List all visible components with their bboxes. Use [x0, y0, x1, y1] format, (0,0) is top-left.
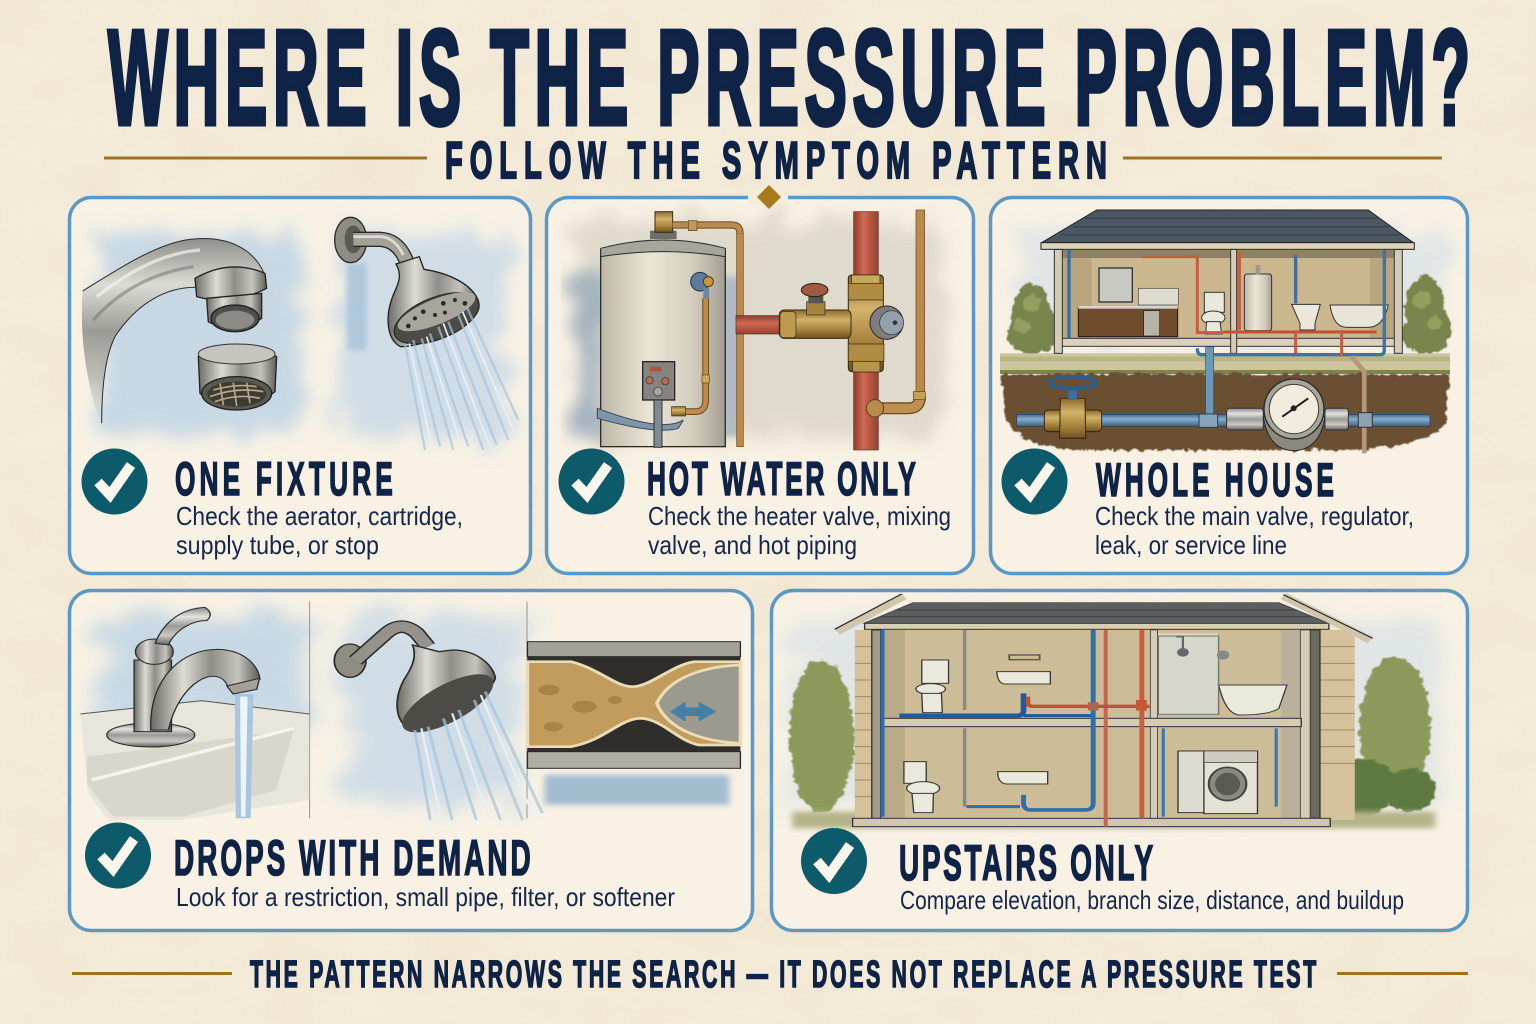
body text: [176, 501, 463, 560]
shower arm: [335, 217, 367, 263]
interior: [1062, 250, 1394, 339]
body text: [648, 501, 951, 560]
panel: upstairs only: [772, 590, 1468, 930]
upstairs fixtures: [904, 660, 1287, 813]
floors: [881, 718, 1301, 727]
faucet: [107, 723, 195, 747]
icon: check: [558, 448, 624, 514]
body text: supply tube, or stop: [176, 530, 379, 560]
heading: whole house: WHOLE HOUSE: [1096, 455, 1334, 507]
walls: [855, 630, 1355, 820]
shower head: [388, 257, 479, 347]
gauge: [1227, 408, 1263, 430]
washer: [1178, 751, 1205, 813]
body text: Compare elevation, branch size, distance, and buildup: [900, 885, 1404, 915]
decorative gap and diamond: [748, 185, 788, 209]
main pipe: [1017, 414, 1430, 426]
illustration: faucet, shower and restricted pipe: [80, 602, 740, 820]
illustration: two-storey house cutaway: [789, 594, 1440, 828]
flow arrow: [670, 702, 716, 722]
heading: drops with demand: DROPS WITH DEMAND: [174, 829, 531, 886]
control box: [643, 362, 675, 400]
kitchen: [1099, 268, 1132, 302]
illustration: faucet aerator and shower head: [82, 217, 518, 450]
icon: check: [85, 822, 151, 888]
gauge on tank: [691, 272, 709, 291]
right pipe: [854, 212, 878, 450]
heading: hot water only: HOT WATER ONLY: [647, 454, 916, 506]
faucet stream: [235, 694, 253, 818]
heading: one fixture: ONE FIXTURE: [175, 454, 393, 506]
body text: valve, and hot piping: [648, 530, 857, 560]
subtitle with rules: FOLLOW THE SYMPTOM PATTERN: [445, 131, 1107, 189]
panel: hot water only: [546, 198, 974, 574]
roof: [1042, 210, 1413, 243]
body text: Check the aerator, cartridge,: [176, 501, 463, 531]
collar: [195, 267, 267, 300]
sink: [80, 701, 309, 820]
illustration: house cutaway with main line: [1000, 210, 1451, 453]
valve: [1044, 410, 1102, 432]
roof: [864, 603, 1329, 623]
ground and soil: [1000, 353, 1450, 374]
icon: check: [801, 828, 867, 894]
subtitle with rules: [104, 131, 1442, 189]
faucet spout: [82, 239, 264, 423]
footer note with rules: THE PATTERN NARROWS THE SEARCH — IT DOES NOT REPLACE A PRESSURE TEST: [250, 952, 1316, 996]
heading: upstairs only: UPSTAIRS ONLY: [899, 834, 1153, 891]
body text: Look for a restriction, small pipe, filter, or softener: [176, 882, 675, 912]
title: WHERE IS THE PRESSURE PROBLEM?: [108, 4, 1470, 153]
panel: whole house: [990, 198, 1468, 574]
spray: [415, 692, 542, 820]
trees: [789, 657, 1435, 815]
panel: one fixture: [70, 198, 530, 574]
body text: Check the heater valve, mixing: [648, 501, 951, 531]
panel: drops with demand: [70, 590, 752, 930]
sink and tub: [1292, 304, 1320, 330]
pipes: [882, 630, 1276, 827]
water: [405, 307, 518, 450]
body text: Check the main valve, regulator,: [1095, 501, 1414, 531]
horizontal pipe: [736, 316, 781, 334]
toilet: [1202, 292, 1225, 334]
water heater: [1244, 274, 1272, 331]
restricted pipe: [527, 657, 740, 752]
shower: [334, 644, 366, 677]
aerator: [198, 347, 277, 408]
bushes: [1008, 275, 1451, 357]
icon: check: [82, 448, 148, 514]
body text: [1095, 501, 1414, 560]
illustration: water heater and mixing valve: [573, 210, 943, 450]
tank: [601, 250, 725, 447]
icon: check: [1002, 448, 1068, 514]
house pipes: [1069, 250, 1384, 357]
body text: leak, or service line: [1095, 530, 1287, 560]
